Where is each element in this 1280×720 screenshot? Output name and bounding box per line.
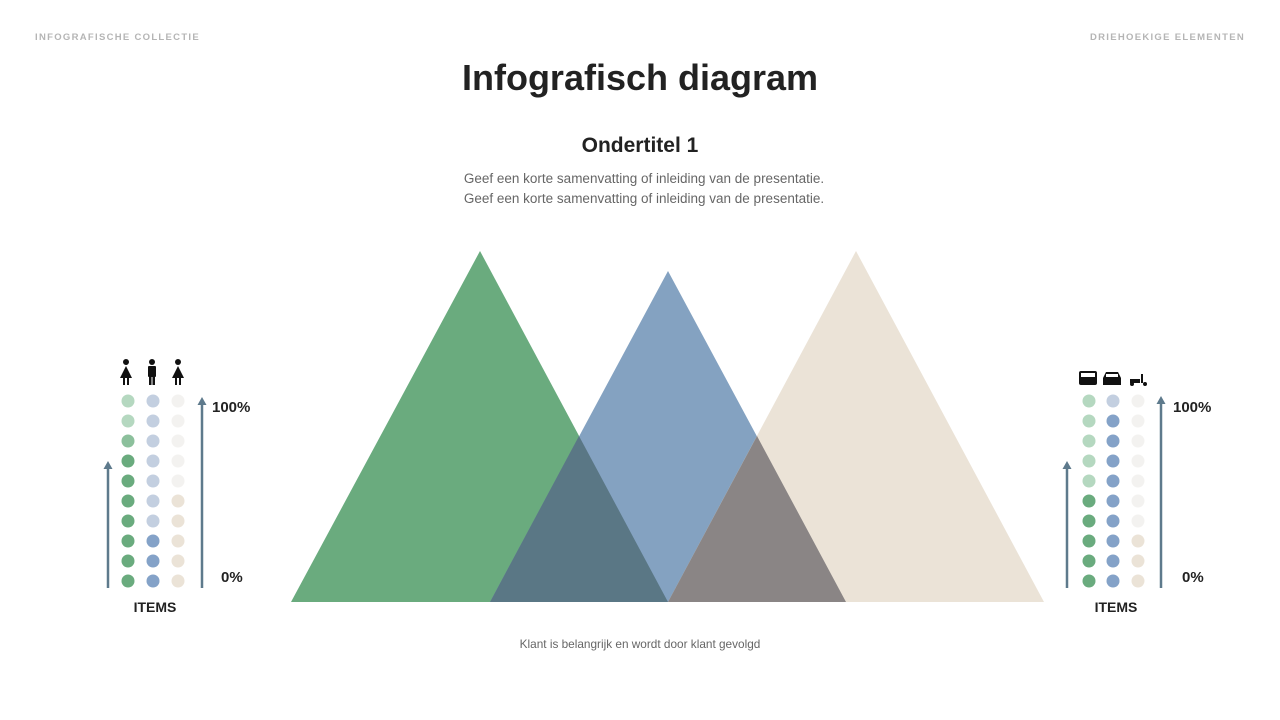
description: Geef een korte samenvatting of inleiding van de presentatie.	[464, 191, 824, 206]
dot columns	[1082, 394, 1144, 588]
icons: people	[120, 359, 184, 385]
header right: DRIEHOEKIGE ELEMENTEN	[1090, 32, 1245, 43]
labels	[1095, 399, 1211, 615]
dot columns	[122, 394, 184, 588]
labels: 100%	[1173, 399, 1211, 416]
labels: ITEMS	[134, 599, 176, 615]
description: Geef een korte samenvatting of inleiding van de presentatie.	[464, 171, 824, 186]
left panel	[108, 359, 250, 615]
header left: INFOGRAFISCHE COLLECTIE	[35, 32, 200, 43]
triangles chart	[291, 251, 1044, 602]
labels	[134, 399, 250, 615]
description	[464, 171, 824, 206]
title: Infografisch diagram	[462, 57, 818, 98]
labels: 0%	[1182, 569, 1204, 586]
arrows	[108, 404, 202, 588]
labels: 100%	[212, 399, 250, 416]
labels: ITEMS	[1095, 599, 1137, 615]
right panel	[1067, 371, 1211, 615]
subtitle: Ondertitel 1	[582, 134, 699, 157]
icons: vehicles	[1079, 371, 1147, 386]
arrows	[1067, 403, 1161, 588]
caption: Klant is belangrijk en wordt door klant gevolgd	[520, 637, 760, 651]
labels: 0%	[221, 569, 243, 586]
